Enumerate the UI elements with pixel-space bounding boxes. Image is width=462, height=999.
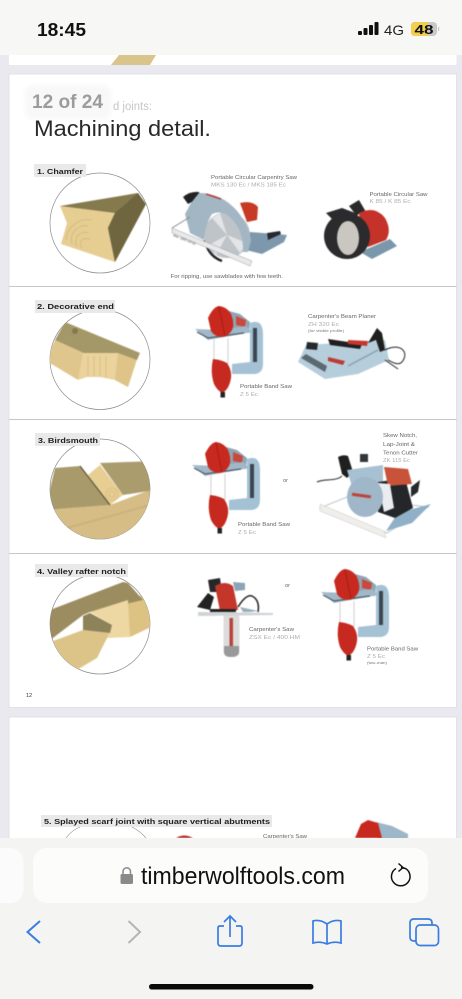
- row 2: decorative end: [35, 300, 405, 410]
- wood detail circle: chamfer: [50, 173, 150, 273]
- caption: circular carpentry saw: [211, 175, 298, 188]
- wood sliver: [111, 55, 156, 65]
- label: 5. Splayed scarf joint: [41, 815, 272, 827]
- battery: 48: [414, 22, 434, 37]
- faded heading: d joints:: [113, 101, 152, 113]
- previous tab: [0, 848, 24, 903]
- tool tops: [176, 820, 408, 840]
- row 4: valley rafter notch: [35, 564, 419, 680]
- caption: skew notch cutter: Lap-Joint &: [383, 442, 415, 448]
- url: timberwolftools.com: [141, 863, 345, 890]
- caption: skew notch cutter: Skew Notch,: [383, 433, 417, 439]
- caption: beam planer: Carpenter's Beam Planer: [308, 314, 376, 320]
- caption: portable circular saw: K 85 / K 85 Ec: [370, 199, 411, 205]
- wood detail circle: valley rafter notch: [50, 577, 150, 674]
- page number: 12: [26, 693, 32, 699]
- caption: portable circular saw: Portable Circular Saw: [370, 192, 429, 198]
- icon: bookmarks: [313, 920, 341, 944]
- caption: band saw: [238, 522, 291, 536]
- panel: page 13: [9, 717, 456, 847]
- caption: band saw: [240, 384, 293, 398]
- label: 4. Valley rafter notch: [35, 564, 128, 577]
- tool: beam planer: [298, 328, 405, 379]
- address bar: [33, 848, 428, 903]
- tool: band saw: [192, 442, 260, 534]
- label: 2. Decorative end: [35, 300, 115, 313]
- icon: reload: [391, 864, 410, 886]
- battery: [411, 22, 439, 37]
- caption: band saw: Z 5 Ec: [367, 654, 385, 660]
- status bar: [0, 0, 462, 55]
- row 1: chamfer: [34, 164, 429, 280]
- note: ripping: For ripping, use sawblades with few teeth.: [170, 274, 283, 280]
- browser toolbar: [0, 838, 462, 999]
- caption: band saw: (two-man): [367, 661, 387, 665]
- caption: skew notch cutter: [383, 433, 418, 464]
- label: 5. Splayed scarf joint: 5. Splayed scarf joint with square vertical abutments: [44, 817, 270, 826]
- signal bars: [358, 22, 378, 35]
- label: 1. Chamfer: [34, 164, 86, 177]
- caption: skew notch cutter: ZK 115 Ec: [383, 458, 410, 464]
- caption: band saw: Z 5 Ec: [240, 392, 258, 398]
- caption: carpenter's saw: ZSX Ec / 400 HM: [249, 635, 300, 641]
- time: 18:45: [37, 20, 86, 40]
- caption: carpenter's saw: Carpenter's Saw: [249, 627, 295, 633]
- label: 3. Birdsmouth: 3. Birdsmouth: [38, 436, 99, 445]
- tool: band saw: [321, 569, 389, 660]
- icon: forward: [128, 921, 140, 943]
- caption: band saw: Portable Band Saw: [367, 646, 419, 652]
- or: or: [285, 583, 290, 589]
- caption: carpenter's saw: [249, 627, 300, 641]
- page counter overlay: [25, 85, 111, 119]
- wood detail circle: decorative end: [45, 310, 150, 410]
- caption: band saw: Z 5 Ec: [238, 530, 256, 536]
- icon: back: [28, 921, 40, 943]
- caption: band saw: Portable Band Saw: [238, 522, 291, 528]
- panel: previous page: [9, 40, 456, 65]
- caption: circular carpentry saw: MKS 130 Ec / MKS 185 Ec: [211, 182, 286, 188]
- label: 3. Birdsmouth: [35, 433, 100, 446]
- icon: share: [218, 916, 242, 946]
- caption: carpenter's saw: Carpenter's Saw: [263, 834, 308, 840]
- title: Machining detail.: [34, 116, 211, 141]
- caption: beam planer: (for visible profile): [308, 329, 344, 333]
- tool: circular carpentry saw: Max. 1800 120 Ec: [173, 233, 197, 246]
- or: or: [283, 478, 288, 484]
- label: 1. Chamfer: 1. Chamfer: [37, 167, 83, 176]
- caption: circular carpentry saw: Portable Circular Carpentry Saw: [211, 175, 298, 181]
- network: 4G: [384, 22, 404, 38]
- tool: skew notch cutter: [317, 454, 431, 538]
- caption: skew notch cutter: Tenon Cutter: [383, 450, 418, 456]
- caption: beam planer: ZH 320 Ec: [308, 322, 339, 328]
- wood detail circle: birdsmouth: [50, 438, 150, 540]
- label: 4. Valley rafter notch: 4. Valley rafter notch: [37, 567, 127, 576]
- label: 2. Decorative end: 2. Decorative end: [37, 302, 115, 311]
- icon: lock: [120, 868, 133, 884]
- caption: beam planer: [308, 314, 376, 333]
- tool: circular carpentry saw: [172, 192, 287, 266]
- row 3: birdsmouth: [35, 433, 431, 545]
- tool: carpenter's saw: [197, 578, 273, 657]
- caption: band saw: [367, 646, 419, 665]
- caption: band saw: Portable Band Saw: [240, 384, 293, 390]
- tool: portable circular saw: [324, 200, 397, 259]
- panel: page 12: [9, 74, 456, 708]
- page counter overlay: 12 of 24: [32, 92, 103, 113]
- icon: tabs: [410, 919, 438, 946]
- caption: portable circular saw: [370, 192, 429, 205]
- wood circle top: [66, 827, 146, 838]
- tool: band saw: [195, 306, 263, 398]
- home indicator: [149, 984, 314, 990]
